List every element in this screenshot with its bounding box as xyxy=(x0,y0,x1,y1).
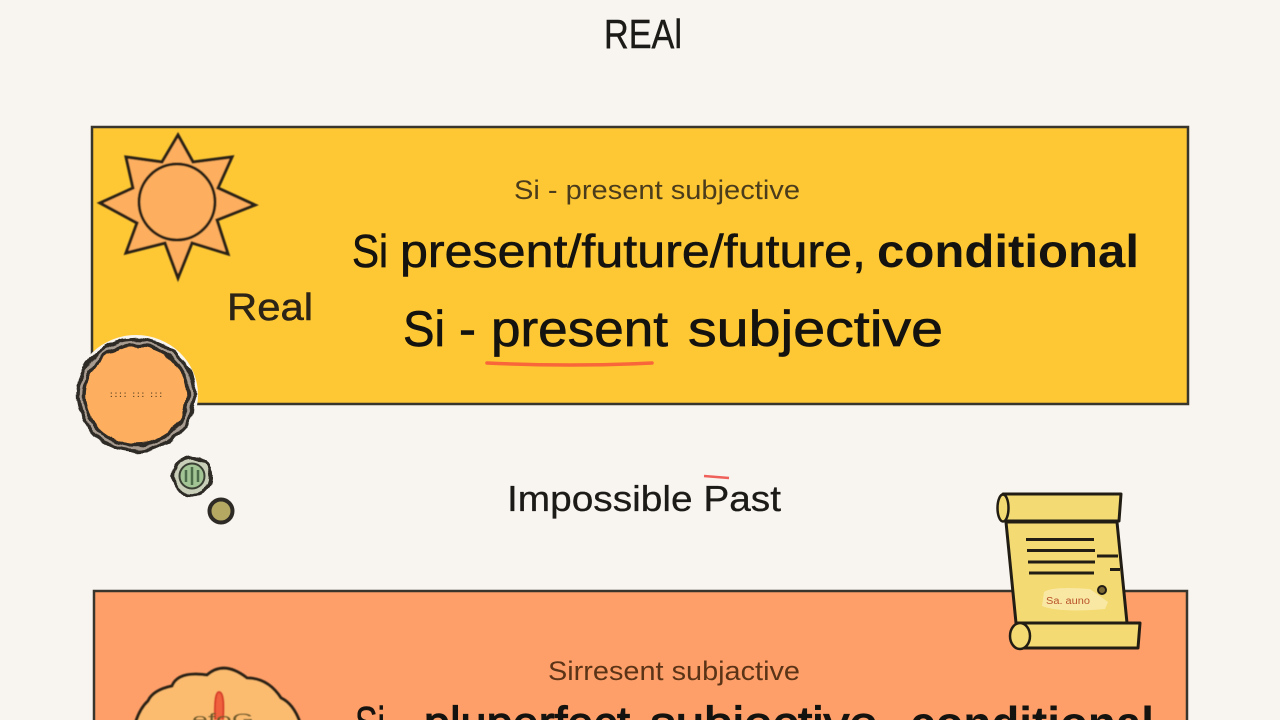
large bubble xyxy=(74,335,198,455)
panel: real conditional xyxy=(92,127,1188,404)
seal note xyxy=(1042,588,1108,610)
bottom roller end xyxy=(1010,623,1030,649)
line: si present subjective large xyxy=(403,301,943,357)
small bubble xyxy=(210,500,232,522)
panel background xyxy=(92,127,1188,404)
panel background xyxy=(94,591,1187,720)
medium bubble xyxy=(173,457,211,495)
underline: present xyxy=(487,363,652,365)
top roller end xyxy=(998,494,1008,522)
line: sirresent subjactive: Sirresent subjactive xyxy=(548,656,800,686)
icon: cloud xyxy=(132,668,304,720)
bottom roller xyxy=(1014,623,1140,648)
line: si pluperfect subjective conditional xyxy=(355,697,1154,720)
line: si present subjective large: Si xyxy=(403,301,445,357)
line: si present subjective small: Si - present subjective xyxy=(514,175,800,205)
top roller xyxy=(1000,494,1121,521)
note text: Sa. auno xyxy=(1046,596,1090,607)
line: si present future conditional xyxy=(352,225,1139,277)
scroll body xyxy=(1006,522,1127,623)
line: si present future conditional: conditional xyxy=(877,225,1139,277)
title: REAl xyxy=(604,11,682,57)
line: si present subjective large: present xyxy=(491,301,668,357)
large bubble: :::: ::: ::: xyxy=(110,390,162,399)
text lines xyxy=(1026,540,1120,573)
icon: thought bubble xyxy=(74,335,232,522)
line: si present subjective large: subjective xyxy=(688,301,943,357)
label: real: Real xyxy=(227,287,313,329)
icon: sun xyxy=(100,135,255,278)
seal dot xyxy=(1098,586,1106,594)
line: si present subjective large: - xyxy=(459,301,476,357)
line: si present future conditional: Si xyxy=(352,225,388,277)
icon: scroll xyxy=(998,494,1140,649)
line: si present future conditional: present/future/future, xyxy=(400,225,866,277)
panel: impossible past conditional xyxy=(94,591,1187,720)
heading: impossible past: Impossible Past xyxy=(507,478,781,519)
